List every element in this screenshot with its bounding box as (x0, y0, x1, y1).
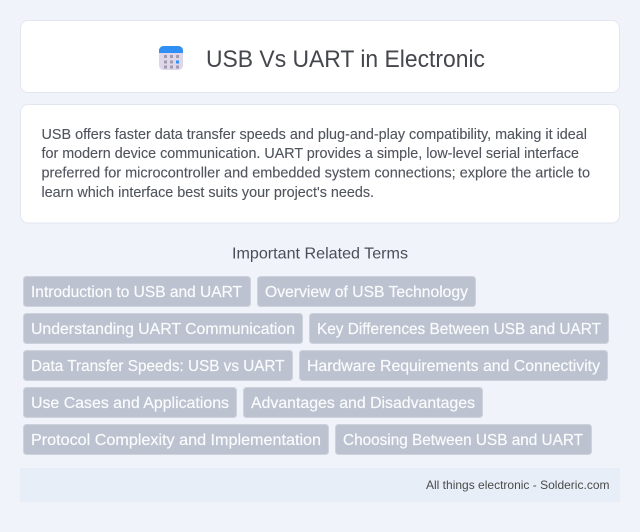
chip: understanding: Understanding UART Communication (31, 321, 295, 338)
chip: understanding (24, 314, 302, 344)
chip: choosing (336, 424, 592, 454)
chip: key differences (310, 314, 608, 344)
footer credit: All things electronic - Solderic.com (426, 478, 610, 492)
title: USB Vs UART in Electronic (206, 46, 485, 73)
chip: protocol: Protocol Complexity and Implementation (31, 432, 321, 449)
heading: related terms: Important Related Terms (232, 246, 408, 262)
chip: key differences: Key Differences Between USB and UART (317, 321, 601, 338)
chip: protocol (24, 424, 328, 454)
chip: choosing: Choosing Between USB and UART (343, 432, 583, 449)
chip: advantages: Advantages and Disadvantages (251, 395, 475, 412)
text block: description (42, 127, 590, 201)
chip: overview (258, 276, 476, 306)
chip: data transfer (24, 350, 292, 380)
text block: description: preferred for microcontroller and embedded system connections; explore the article to (42, 166, 590, 182)
icon: calendar grid (159, 46, 183, 70)
chip: advantages (244, 388, 482, 418)
panel: term chips (24, 276, 608, 454)
chip: use cases: Use Cases and Applications (31, 395, 229, 412)
chip: introduction: Introduction to USB and UART (31, 284, 242, 301)
text block: description: for modern device communication. UART provides a simple, low-level serial interface (42, 146, 579, 162)
text block: description: learn which interface best suits your project's needs. (42, 185, 374, 201)
chip: hardware: Hardware Requirements and Connectivity (307, 358, 600, 375)
text block: description: USB offers faster data transfer speeds and plug-and-play compatibility, making it ideal (42, 127, 587, 143)
chip: data transfer: Data Transfer Speeds: USB vs UART (31, 358, 285, 375)
chip: overview: Overview of USB Technology (265, 284, 468, 301)
chip: introduction (24, 276, 250, 306)
footer bar (20, 468, 620, 502)
panel: description card (20, 104, 620, 223)
chip: use cases (24, 388, 236, 418)
chip: hardware (300, 350, 608, 380)
panel: header card (20, 20, 620, 92)
